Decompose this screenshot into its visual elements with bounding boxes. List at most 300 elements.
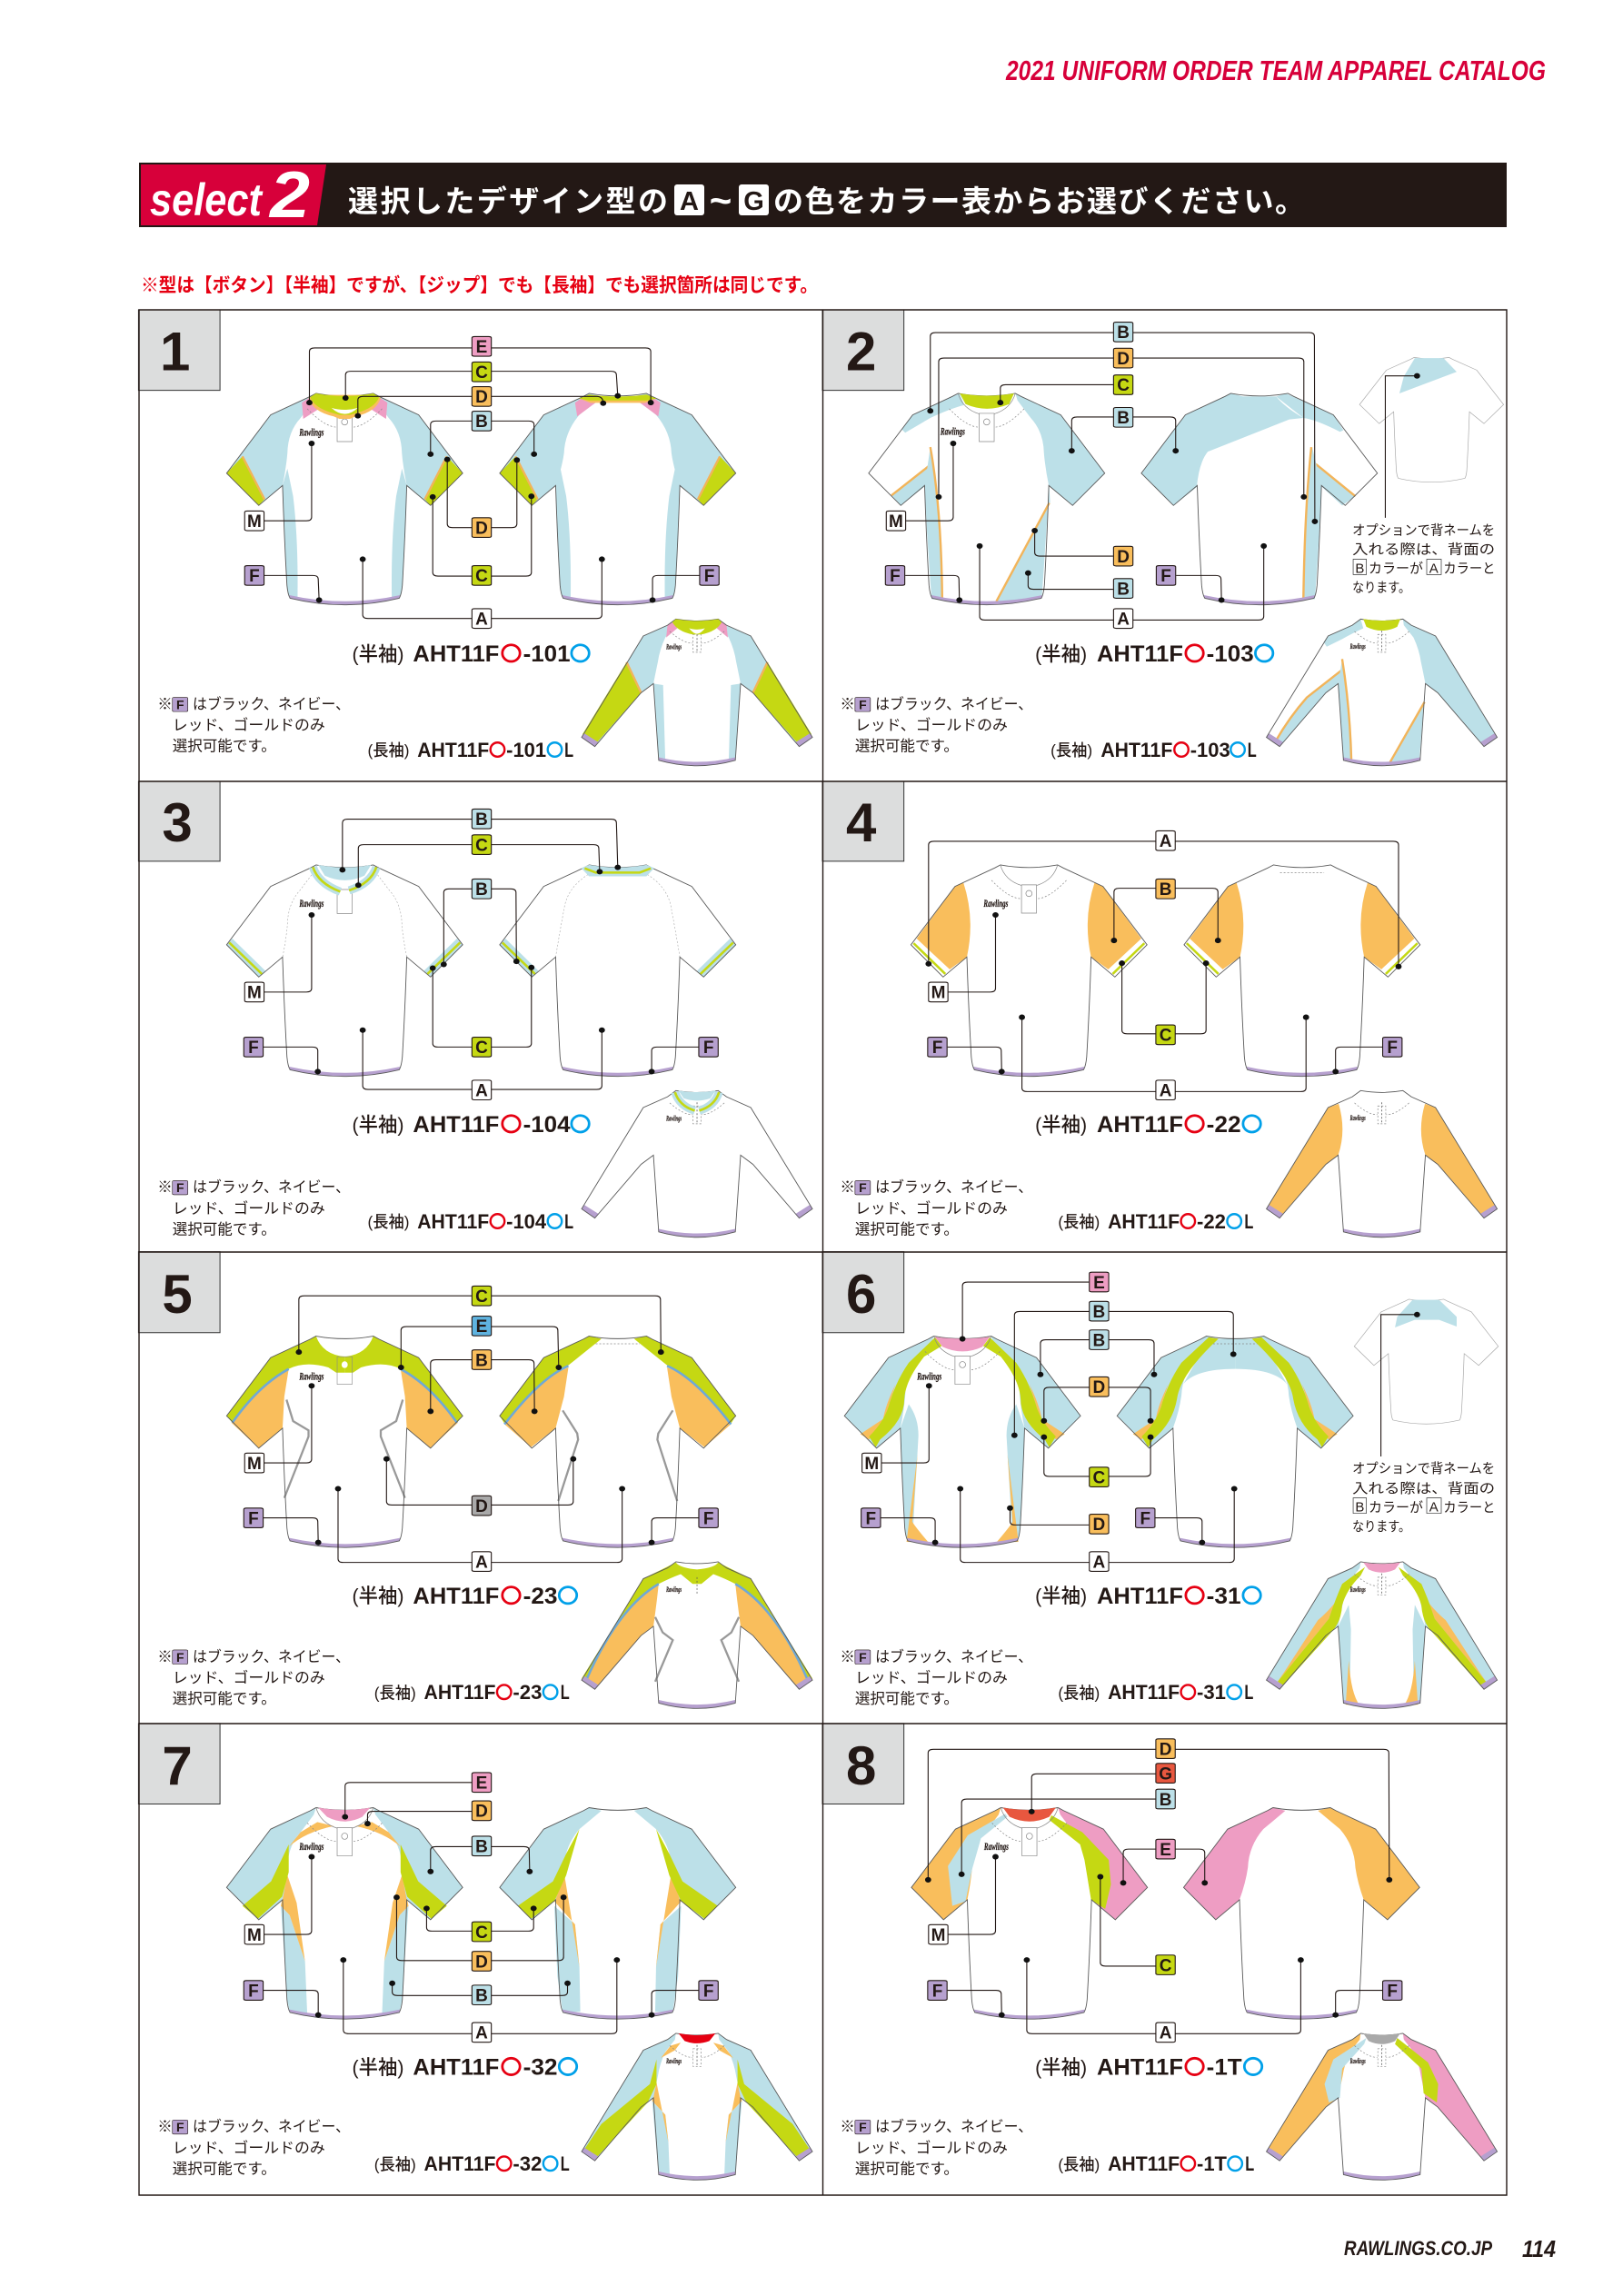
callout B top [427,1836,533,1874]
shirt front: Rawlings [983,1842,1009,1853]
callout B top: B [1117,323,1130,343]
shirt front: Rawlings [299,1372,324,1383]
product code short sleeve: AHT11F [413,1112,499,1138]
callout C: C [1160,1027,1172,1046]
note: 選択可能です。 [855,1221,959,1238]
product code short sleeve: -32 [523,2055,558,2081]
note: 選択可能です。 [173,1690,276,1707]
product code long sleeve: AHT11F [1108,1210,1180,1233]
note: F [859,1180,867,1195]
long sleeve shirt [1267,1090,1498,1237]
callout B mid [1069,407,1179,453]
note [157,1647,350,1707]
note [840,1178,1032,1238]
note [840,694,1032,755]
header bar: select 2 [139,159,1507,232]
callout M [244,441,314,532]
callout E: E [1093,1274,1105,1293]
shirt back [500,393,736,605]
product code long sleeve: AHT11F [417,739,489,761]
callout F left: F [890,567,901,586]
product code short sleeve: -1T [1207,2055,1242,2081]
long sleeve shirt [582,1090,812,1237]
product code short sleeve: AHT11F [1097,2055,1183,2081]
note: 選択可能です。 [173,2160,276,2177]
note: F [859,1650,867,1665]
product code short sleeve: (半袖) [1035,1585,1087,1607]
shirt front [844,1337,1080,1547]
product code long sleeve: L [561,1681,570,1704]
product code long sleeve: AHT11F [1100,739,1172,761]
number tile 8: 8 [846,1735,876,1796]
callout B upper [1011,1301,1237,1438]
product code long sleeve: -103 [1190,739,1230,761]
callout D bottom: D [475,519,488,538]
product code short sleeve [353,641,589,667]
number tile 6: 6 [846,1264,876,1325]
note: はブラック、ネイビー、 [875,2117,1032,2135]
callout A [1024,1957,1304,2043]
option name note: 入れる際は、背面の [1352,1481,1495,1496]
product code long sleeve: L [1244,1210,1253,1233]
callout E: E [476,1774,487,1794]
product code short sleeve: (半袖) [353,1113,403,1136]
callout D upper [1041,1377,1153,1424]
callout A [957,1486,1238,1572]
shirt front [226,865,463,1077]
shirt front [226,1337,463,1547]
product code long sleeve: L [564,1210,573,1233]
callout D mid: D [475,1953,488,1972]
callout C: C [475,1923,488,1943]
callout D upper: D [1093,1378,1105,1397]
callout B top [339,809,621,872]
callout C [1041,1435,1153,1487]
callout F back [1156,566,1225,602]
panel 8 [822,1724,1498,2180]
note: はブラック、ネイビー、 [193,694,350,712]
option name note: カラーと [1443,562,1495,577]
product code short sleeve: AHT11F [1097,1584,1183,1609]
note: F [859,2120,867,2134]
callout C [423,1905,537,1943]
callout B [427,1350,538,1414]
option name note: オプションで背ネームを [1352,522,1495,538]
shirt front: Rawlings [983,899,1009,909]
note: ※ [840,1649,855,1665]
callout B mid [441,879,520,967]
callout C: C [1160,1956,1172,1975]
option name note: 入れる際は、背面の [1352,542,1495,557]
callout D: D [1160,1740,1171,1759]
product code long sleeve: -23 [513,1681,542,1704]
product code short sleeve: -31 [1207,1584,1241,1609]
product code long sleeve: L [1244,1681,1253,1704]
long sleeve shirt: Rawlings [1349,641,1366,651]
note: レッド、ゴールドのみ [173,1199,325,1218]
callout E: E [476,338,487,357]
note: F [176,697,184,711]
callout F right [649,1508,718,1546]
callout F left [885,566,962,602]
panel 2 [822,310,1504,766]
callout F right [650,566,719,602]
callout M: M [889,512,903,532]
callout C [997,375,1133,405]
note: ※ [840,1179,855,1196]
callout F left: F [932,1039,942,1058]
long sleeve shirt: Rawlings [666,2056,682,2065]
callout F right: F [1387,1039,1398,1058]
callout A: A [475,1553,488,1572]
option name note: カラーが [1369,1500,1423,1516]
panel 3 [138,781,812,1238]
product code long sleeve: -101 [506,739,546,761]
note: 選択可能です。 [173,738,276,755]
note: ※ [157,1179,173,1196]
product code long sleeve [374,2152,570,2175]
callout A: A [475,2024,488,2043]
product code short sleeve: AHT11F [1097,641,1183,667]
callout A bottom: A [1160,1081,1172,1100]
callout D top [364,1801,492,1826]
product code long sleeve [1058,2152,1254,2175]
callout D top: D [475,1803,488,1822]
shirt front: Rawlings [940,427,965,438]
callout C low [430,965,534,1058]
note [157,1178,350,1238]
note: はブラック、ネイビー、 [193,1647,350,1665]
callout F left [928,1981,1005,2018]
callout M [929,912,999,1003]
callout B: B [1160,1791,1171,1810]
note [840,2117,1032,2177]
shirt back [1141,393,1378,605]
callout A [360,556,605,629]
heading text: 選択したデザイン型の [348,184,668,218]
product code short sleeve [353,1112,589,1138]
callout C top: C [475,363,488,383]
panel 7 [138,1724,812,2180]
callout D lower [1007,1506,1109,1535]
callout E [960,1272,1109,1342]
shirt front: Rawlings [299,1842,324,1853]
select tag [141,159,326,232]
callout F right: F [1387,1982,1398,2001]
callout B [1110,879,1221,943]
note: 選択可能です。 [855,2160,959,2177]
product code long sleeve [374,1681,570,1704]
callout A [360,1028,605,1100]
product code short sleeve: AHT11F [413,2055,499,2081]
note: はブラック、ネイビー、 [875,1647,1032,1665]
note: はブラック、ネイビー、 [875,694,1032,712]
product code long sleeve: (長袖) [367,741,409,760]
callout F left: F [248,1982,259,2001]
shirt back [500,865,736,1077]
callout M [244,1854,314,1945]
long sleeve shirt [1267,2033,1498,2180]
shirt front [226,393,463,605]
number tile 3: 3 [162,792,193,853]
callout D top [354,387,606,419]
callout D: D [475,1497,488,1516]
shirt back [1117,1337,1353,1547]
callout C top: C [475,836,488,855]
product code long sleeve: L [1245,2152,1254,2175]
product code long sleeve: (長袖) [374,1684,416,1702]
callout A: A [475,610,488,629]
product code short sleeve: (半袖) [1035,642,1087,665]
product code short sleeve [353,2055,577,2081]
number tile 2: 2 [846,322,876,383]
product code long sleeve: -22 [1197,1210,1226,1233]
product code short sleeve: -22 [1207,1112,1241,1138]
callout D bottom [444,457,520,538]
panel 1 [138,310,812,766]
product code long sleeve: (長袖) [374,2155,416,2173]
callout B lower [1038,1330,1157,1377]
callout E [306,336,654,405]
heading text: の色をカラー表からお選びください。 [773,184,1305,218]
callout M: M [864,1455,879,1474]
callout A: A [1093,1553,1106,1572]
callout M: M [247,512,262,532]
long sleeve shirt: Rawlings [666,1585,682,1594]
note: ※ [157,696,173,712]
callout A bottom [1019,1015,1309,1100]
product code short sleeve: -104 [523,1112,571,1138]
callout B top: B [475,810,488,830]
note: はブラック、ネイビー、 [875,1178,1032,1196]
product code short sleeve: (半袖) [353,2056,403,2079]
product code long sleeve: L [1248,739,1257,761]
number tile 3 [138,781,220,861]
callout B low: B [475,1986,488,2005]
long sleeve shirt [582,619,812,766]
grid frame [139,310,1507,2195]
note: F [859,697,867,711]
callout A [340,1957,620,2043]
callout D [383,1456,576,1516]
option note leader [1385,373,1420,518]
note: レッド、ゴールドのみ [855,1668,1008,1686]
callout M: M [931,984,945,1003]
shirt back [1184,865,1420,1077]
note: ※ [840,2119,855,2135]
option name note: なります。 [1352,581,1410,596]
callout F right: F [703,1509,713,1528]
option name note: なります。 [1352,1519,1410,1535]
product code long sleeve: -31 [1197,1681,1226,1704]
shirt front [911,1808,1148,2019]
callout E [342,1773,492,1820]
product code short sleeve: AHT11F [413,1584,499,1609]
product code short sleeve: AHT11F [413,641,499,667]
callout D low: D [1117,548,1130,567]
callout B top: B [475,1838,488,1857]
callout A top: A [1160,832,1172,851]
callout F right [649,1038,718,1074]
callout M: M [247,984,262,1003]
product code short sleeve [1035,641,1273,667]
shirt front [869,393,1105,605]
product code long sleeve [367,739,573,761]
note: はブラック、ネイビー、 [193,2117,350,2135]
note: レッド、ゴールドのみ [173,716,325,734]
select tag: 2 [268,159,310,232]
product code short sleeve: (半袖) [353,642,403,665]
product code short sleeve [1035,1584,1260,1609]
callout C top [355,835,602,888]
red note: ※型は【ボタン】【半袖】ですが、【ジップ】でも【長袖】でも選択箇所は同じです。 [141,274,818,296]
callout F back: F [1160,567,1171,586]
product code short sleeve: -23 [523,1584,558,1609]
long sleeve shirt [582,2033,812,2180]
shirt back [500,1808,736,2019]
page number: 114 [1522,2235,1556,2262]
option name note: A [1429,561,1439,576]
callout D [925,1739,1392,1883]
callout F left [244,566,323,602]
callout C bottom: C [475,567,488,586]
option name note: B [1355,1500,1364,1516]
number tile 6 [822,1252,904,1333]
product code long sleeve: (長袖) [1050,741,1092,760]
product code long sleeve: AHT11F [1108,2152,1180,2175]
long sleeve shirt [1267,619,1498,766]
note [157,694,350,755]
callout F left: F [932,1982,942,2001]
callout B mid: B [1117,409,1130,428]
callout B top [927,323,1318,524]
long sleeve shirt: Rawlings [1349,1585,1366,1594]
product code long sleeve: AHT11F [1108,1681,1180,1704]
callout F left: F [249,567,260,586]
option name note [1352,1461,1495,1535]
callout M: M [247,1926,262,1945]
note: F [176,1650,184,1665]
callout B [427,412,537,457]
callout F back [1136,1508,1205,1546]
option name note: B [1355,561,1364,576]
callout D top [936,348,1307,500]
number tile 1 [138,310,220,391]
number tile 4 [822,781,904,861]
number tile 7 [138,1724,220,1804]
note: ※ [157,2119,173,2135]
product code long sleeve [367,1210,573,1233]
callout M: M [247,1455,262,1474]
long sleeve shirt [1267,1562,1498,1708]
option name note: オプションで背ネームを [1352,1461,1495,1476]
callout M [244,912,314,1003]
heading text [348,179,1305,222]
callout M: M [931,1926,945,1945]
long sleeve shirt [582,1562,812,1708]
long sleeve shirt: Rawlings [666,642,682,651]
callout F right [1332,1981,1402,2018]
callout B low: B [1117,580,1130,599]
callout A: A [475,1081,488,1100]
shirt back [1183,1808,1419,2019]
callout M [929,1854,999,1945]
product code long sleeve: AHT11F [424,1681,496,1704]
callout M [886,441,956,532]
product code long sleeve: (長袖) [367,1213,409,1231]
footer website: RAWLINGS.CO.JP [1344,2237,1492,2260]
callout D top: D [1117,350,1130,369]
note: F [176,2120,184,2134]
callout B low [389,1981,571,2005]
callout F left [244,1981,322,2018]
product code short sleeve: -101 [523,641,571,667]
callout F right: F [704,567,714,586]
callout B [959,1789,1175,1877]
product code short sleeve [1035,1112,1260,1138]
callout A: A [1160,2024,1172,2043]
option name note: カラーと [1443,1500,1495,1516]
note: レッド、ゴールドのみ [855,716,1008,734]
product code long sleeve [1058,1681,1253,1704]
callout F right: F [703,1039,713,1058]
number tile 8 [822,1724,904,1804]
product code short sleeve [1035,2055,1262,2081]
product code long sleeve: AHT11F [424,2152,496,2175]
product code long sleeve: (長袖) [1058,1213,1100,1231]
note [157,2117,350,2177]
callout M [244,1383,314,1474]
heading text: A [680,187,699,216]
shirt front: Rawlings [917,1372,942,1383]
callout B: B [475,412,488,432]
product code long sleeve [1050,739,1257,761]
product code short sleeve: (半袖) [1035,1113,1087,1136]
callout E [1120,1839,1208,1885]
product code short sleeve: -103 [1207,641,1254,667]
callout G: G [1159,1764,1172,1784]
product code short sleeve: AHT11F [1097,1112,1183,1138]
product code long sleeve: -32 [513,2152,542,2175]
callout C [1119,960,1210,1046]
panel 4 [822,781,1498,1238]
product code short sleeve: (半袖) [353,1585,403,1607]
callout F left [928,1038,1005,1074]
callout B low [1025,571,1133,599]
note: 選択可能です。 [173,1221,276,1238]
note: はブラック、ネイビー、 [193,1178,350,1196]
product code short sleeve: (半袖) [1035,2056,1087,2079]
panel 5 [138,1252,812,1708]
number tile 5 [138,1252,220,1333]
product code long sleeve: (長袖) [1058,2155,1100,2173]
note: ※ [840,696,855,712]
callout E: E [476,1317,487,1337]
callout M [862,1383,932,1474]
panel 6 [822,1252,1499,1708]
number tile 4: 4 [846,792,877,853]
callout B mid: B [475,880,488,900]
callout C: C [1093,1468,1106,1487]
option name note: カラーが [1369,562,1423,577]
heading text: ~ [710,179,732,222]
small back view [1359,357,1504,482]
note: レッド、ゴールドのみ [173,1668,325,1686]
callout D low [1031,528,1133,567]
callout C [295,1286,664,1355]
callout A [335,1486,625,1572]
shirt front: Rawlings [299,899,324,909]
